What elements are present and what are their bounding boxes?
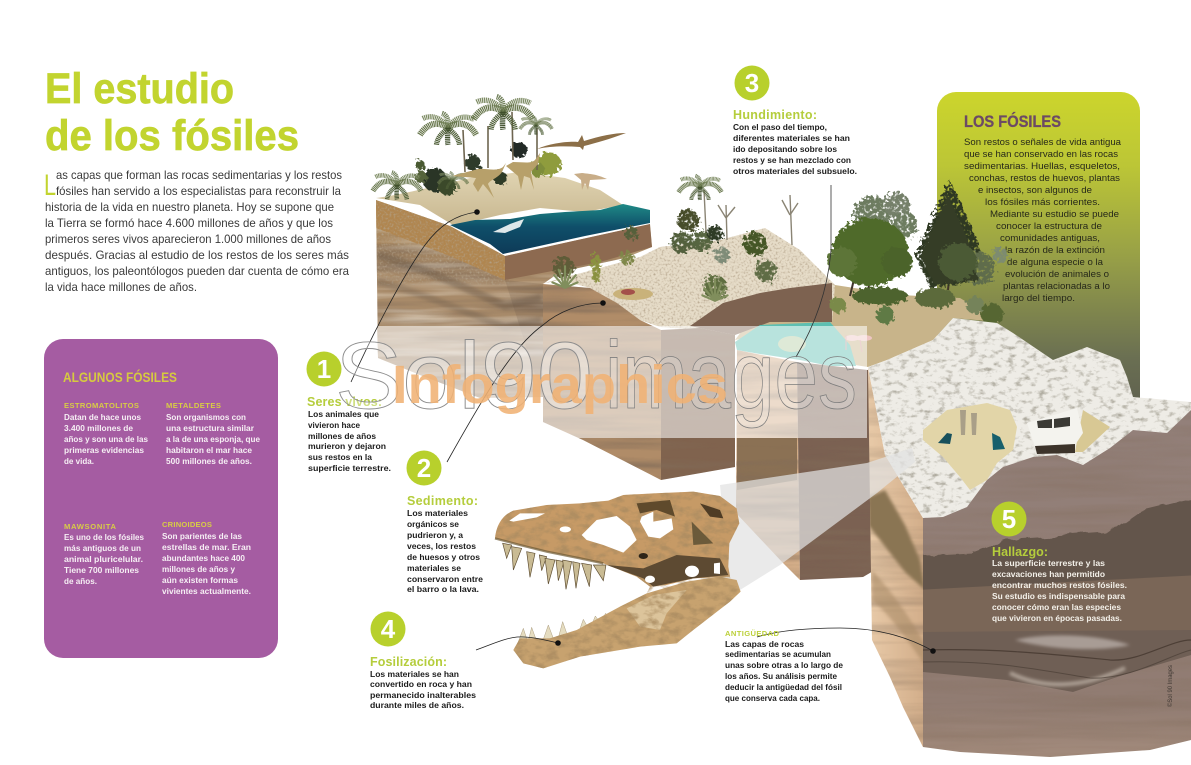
block 1 vegetation <box>373 97 561 199</box>
fossil: crinoideos: estrellas de mar. Eran <box>162 542 251 552</box>
text: los fósiles description: que se han conservado en las rocas <box>964 149 1118 160</box>
rock faces <box>540 284 736 482</box>
truck <box>1027 408 1083 454</box>
intro paragraph: la vida hace millones de años. <box>45 281 197 294</box>
fossil: crinoideos: millones de años y <box>162 564 235 574</box>
text 3: otros materiales del subsuelo. <box>733 166 857 176</box>
text 5: conocer cómo eran las especies <box>992 602 1121 612</box>
fossil: mawsonita: más antiguos de un <box>64 543 141 553</box>
title: El estudio <box>45 65 234 113</box>
text 1: Los animales que <box>308 409 379 419</box>
fossil: estromatolitos <box>64 401 148 466</box>
text: los fósiles description: sedimentarias. Huellas, esqueletos, <box>964 161 1120 172</box>
step 2: sedimento <box>406 450 483 594</box>
callout: antigüedad: ANTIGÜEDAD <box>725 629 780 638</box>
magnifier beam <box>720 448 915 590</box>
pterosaur <box>537 133 626 150</box>
fossil: crinoideos: CRINOIDEOS <box>162 520 212 529</box>
callout: antigüedad <box>725 629 843 703</box>
pond water <box>735 322 856 366</box>
fossil: metaldetes: una estructura similar <box>166 423 255 433</box>
text 2: pudrieron y, a <box>407 530 463 540</box>
sand pits <box>923 403 1017 490</box>
gravel surface <box>540 225 840 340</box>
block 2 vegetation <box>552 176 798 301</box>
number 2 <box>406 450 442 486</box>
gap behind jaw <box>607 555 728 587</box>
fossil: estromatolitos: 3.400 millones de <box>64 423 133 433</box>
fossil: mawsonita: animal pluricelular. <box>64 554 143 564</box>
text: los fósiles description: comunidades antiguas, <box>1000 233 1100 244</box>
text 1: murieron y dejaron <box>308 441 386 451</box>
step 4: fosilización <box>370 612 476 710</box>
leader line 2 <box>447 300 606 462</box>
ground background <box>735 285 1000 367</box>
flamingos <box>845 335 872 352</box>
upper skull <box>495 492 739 587</box>
excavators <box>938 410 1005 450</box>
text 2: de huesos y otros <box>407 552 480 562</box>
text 1: superficie terrestre. <box>308 463 391 473</box>
callout: antigüedad: sedimentarias se acumulan <box>725 649 831 659</box>
fossil: mawsonita: de años. <box>64 576 97 586</box>
text 4: permanecido inalterables <box>370 690 476 700</box>
fossil: crinoideos: vivientes actualmente. <box>162 586 251 596</box>
heading: algunos fósiles: ALGUNOS FÓSILES <box>63 370 177 385</box>
fossil: metaldetes: habitaron el mar hace <box>166 445 252 455</box>
text: los fósiles description: largo del tiempo. <box>1002 293 1075 304</box>
number 5: 5 <box>1002 504 1016 534</box>
block 2: gravel surface with remains <box>540 225 1000 482</box>
text 5: La superficie terrestre y las <box>992 558 1105 568</box>
text 2 <box>407 508 483 594</box>
text 2: el barro o la lava. <box>407 584 479 594</box>
text 2: Los materiales <box>407 508 468 518</box>
text 2: orgánicos se <box>407 519 459 529</box>
fossil: mawsonita <box>64 522 144 586</box>
bone texture <box>493 490 743 670</box>
fossil: metaldetes: a la de una esponja, que <box>166 434 260 444</box>
text: los fósiles description: conchas, restos de huevos, plantas <box>969 173 1120 184</box>
fossil: metaldetes <box>166 401 260 466</box>
text 1 <box>308 409 391 473</box>
sea <box>450 204 650 254</box>
text 3: restos y se han mezclado con <box>733 155 851 165</box>
intro paragraph: primeros seres vivos aparecieron 1.000 millones de años <box>45 233 331 246</box>
fossil: estromatolitos: de vida. <box>64 456 94 466</box>
fossil: estromatolitos: Datan de hace unos <box>64 412 141 422</box>
text 5: excavaciones han permitido <box>992 569 1105 579</box>
number 3: 3 <box>745 68 759 98</box>
fossil: estromatolitos: ESTROMATOLITOS <box>64 401 139 410</box>
watermark <box>335 322 857 429</box>
heading 4: Fosilización: <box>370 655 447 669</box>
brown rock edge <box>690 283 832 335</box>
title <box>45 65 299 160</box>
text: los fósiles description: plantas relacionadas a lo <box>1003 281 1110 292</box>
sand surface <box>376 172 623 225</box>
fossil: crinoideos: abundantes hace 400 <box>162 553 245 563</box>
jaw edge shadows <box>495 538 603 563</box>
text 3: diferentes materiales se han <box>733 133 850 143</box>
intro paragraph: después. Gracias al estudio de los restos de los seres más <box>45 249 349 262</box>
fossil: crinoideos: Son parientes de las <box>162 531 242 541</box>
text 2: veces, los restos <box>407 541 476 551</box>
dinosaurs <box>452 153 607 198</box>
watermark: images <box>605 322 857 429</box>
text 3 <box>733 122 857 176</box>
marine animal <box>493 219 524 233</box>
intro paragraph: la Tierra se formó hace 4.600 millones de años y que los <box>45 217 333 230</box>
text: los fósiles description: conocer la estructura de <box>996 221 1102 232</box>
leader line 5 <box>757 628 936 654</box>
watermark: Sol90 <box>335 323 593 429</box>
step 5: hallazgo <box>992 502 1127 623</box>
leader line 4 <box>476 637 561 650</box>
heading 2: Sedimento: <box>407 494 478 508</box>
text 5: Su estudio es indispensable para <box>992 591 1125 601</box>
rock faces <box>735 345 877 585</box>
upper teeth <box>503 543 606 589</box>
heading 3: Hundimiento: <box>733 108 817 122</box>
text 3: Con el paso del tiempo, <box>733 122 827 132</box>
text: los fósiles description: evolución de animales o <box>1005 269 1109 280</box>
step 1: seres vivos <box>306 352 391 473</box>
forest trees <box>827 180 1008 325</box>
text 2: conservaron entre <box>407 574 483 584</box>
block 1: prehistoric surface with sea <box>376 172 652 398</box>
text 4: durante miles de años. <box>370 700 464 710</box>
text 1: sus restos en la <box>308 452 372 462</box>
callout: antigüedad: unas sobre otras a lo largo de <box>725 660 843 670</box>
fossil: mawsonita: Tiene 700 millones <box>64 565 139 575</box>
text 4 <box>370 669 476 710</box>
number 4: 4 <box>381 614 396 644</box>
fossil: crinoideos: aún existen formas <box>162 575 238 585</box>
intro paragraph: fósiles han servido a los especialistas para reconstruir la <box>56 185 342 198</box>
intro paragraph: historia de la vida en nuestro planeta. Hoy se supone que <box>45 201 334 214</box>
jaw highlight <box>627 590 687 630</box>
skull windows <box>509 500 723 583</box>
rock strata <box>376 200 652 398</box>
fossil: mawsonita: MAWSONITA <box>64 522 117 531</box>
number 1: 1 <box>317 354 331 384</box>
callout: antigüedad: Las capas de rocas <box>725 639 804 649</box>
panel: los fósiles <box>937 92 1140 425</box>
front face <box>915 410 1191 760</box>
text 5: que vivieron en épocas pasadas. <box>992 613 1122 623</box>
rock surface <box>865 315 1191 520</box>
intro paragraph <box>44 169 350 294</box>
watermark band <box>378 326 867 438</box>
text 5: encontrar muchos restos fósiles. <box>992 580 1127 590</box>
text 1: millones de años <box>308 431 376 441</box>
block 3: pond <box>735 322 877 585</box>
heading 5: Hallazgo: <box>992 545 1048 559</box>
intro paragraph: L <box>44 169 56 202</box>
skull fossil <box>493 490 743 670</box>
credit: ©Sol 90 Images <box>1167 665 1174 707</box>
text: los fósiles description: los fósiles más corrientes. <box>985 197 1100 208</box>
number 2: 2 <box>417 453 431 483</box>
text: los fósiles description: Mediante su estudio se puede <box>990 209 1119 220</box>
leader line 3 <box>796 185 831 357</box>
intro paragraph: antiguos, los paleontólogos pueden dar cuenta de cómo era <box>45 265 350 278</box>
block 5: excavation <box>865 315 1191 760</box>
text: los fósiles description: Son restos o señales de vida antigua <box>964 137 1122 148</box>
text: los fósiles description: la razón de la extinción <box>1005 245 1105 256</box>
text 4: Los materiales se han <box>370 669 459 679</box>
text 5 <box>992 558 1127 623</box>
heading 1: Seres vivos: <box>307 395 382 409</box>
text 4: convertido en roca y han <box>370 679 472 689</box>
panel: algunos fósiles <box>44 339 278 658</box>
fossil: metaldetes: METALDETES <box>166 401 221 410</box>
fossil: crinoideos <box>162 520 251 596</box>
callout: antigüedad: deducir la antigüedad del fósil <box>725 682 842 692</box>
title: de los fósiles <box>45 112 299 160</box>
callout: antigüedad: que conserva cada capa. <box>725 693 820 703</box>
fossil: metaldetes: 500 millones de años. <box>166 456 252 466</box>
fossil remains <box>613 288 653 300</box>
text 3: ido depositando sobre los <box>733 144 837 154</box>
fossil: estromatolitos: primeras evidencias <box>64 445 144 455</box>
side face <box>868 368 923 747</box>
text 2: materiales se <box>407 563 461 573</box>
text: los fósiles description <box>964 137 1122 304</box>
leader line 1 <box>351 209 480 382</box>
fossil: estromatolitos: años y son una de las <box>64 434 148 444</box>
text: los fósiles description: de alguna especie o la <box>1007 257 1104 268</box>
intro paragraph: as capas que forman las rocas sedimentarias y los restos <box>56 169 342 182</box>
step 3: hundimiento <box>733 66 857 176</box>
text: los fósiles description: e insectos, son algunos de <box>978 185 1092 196</box>
fossil: metaldetes: Son organismos con <box>166 412 246 422</box>
heading: los fósiles: LOS FÓSILES <box>964 112 1061 131</box>
text 1: vivieron hace <box>308 420 360 430</box>
lower teeth <box>518 613 608 642</box>
lower jaw <box>513 577 741 668</box>
fossil: mawsonita: Es uno de los fósiles <box>64 532 144 542</box>
callout: antigüedad: los años. Su análisis permite <box>725 671 837 681</box>
watermark: Infographics <box>392 355 728 415</box>
